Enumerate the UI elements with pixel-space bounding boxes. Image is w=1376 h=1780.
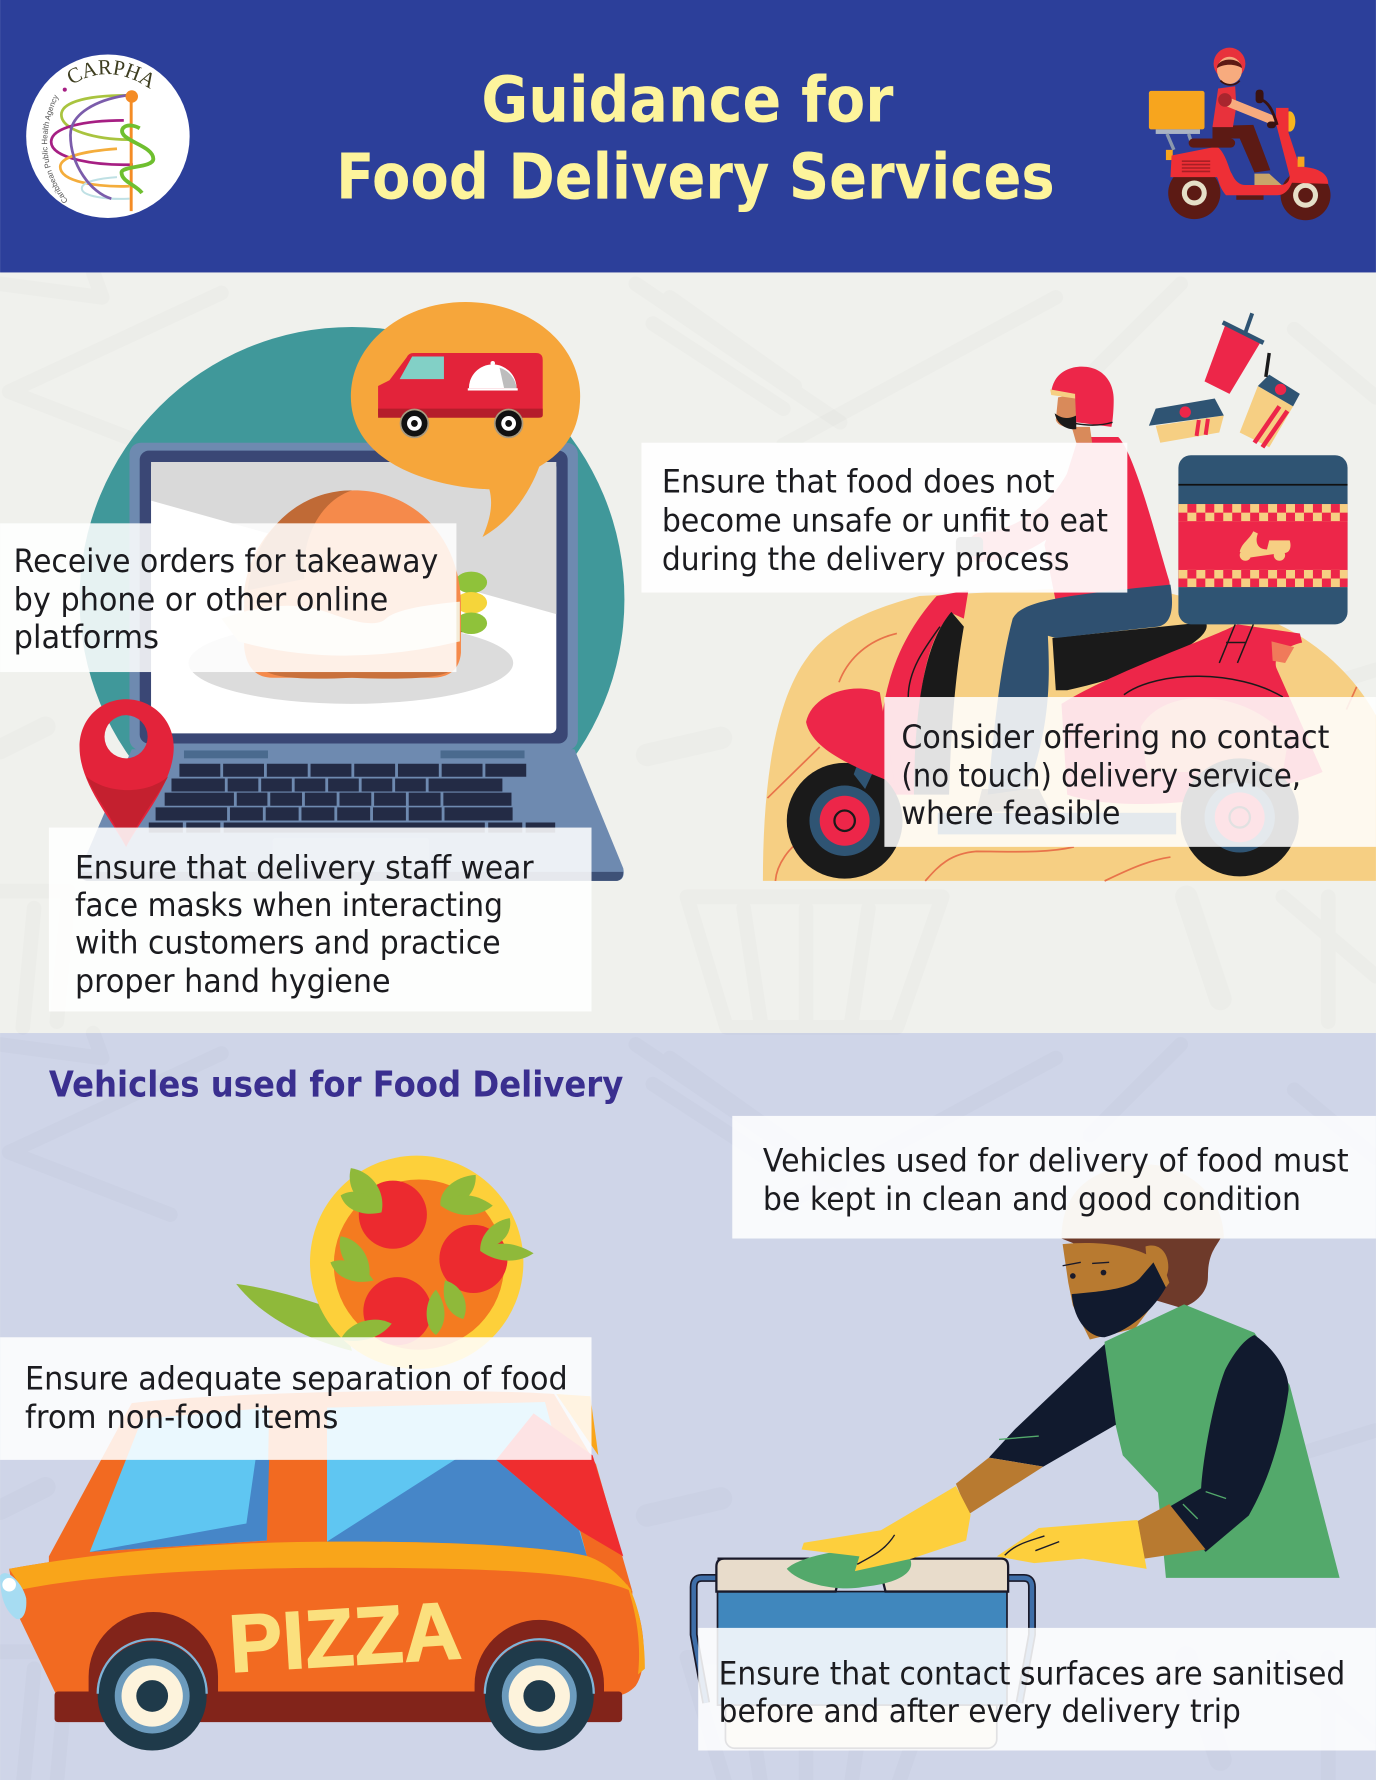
food items	[1149, 313, 1300, 447]
left arm	[989, 1344, 1116, 1467]
illustration: laptop with burger and delivery bubble	[80, 302, 624, 881]
icon: CARPHA logo: CARPHA	[68, 60, 152, 89]
callout: face masks and hygiene: face masks when interacting	[75, 886, 503, 924]
icon: CARPHA logo: Caribbean Public Health Agency	[42, 94, 67, 203]
illustration: pizza delivery car	[0, 1391, 645, 1750]
title: Food Delivery Services	[336, 140, 1055, 214]
callout: food safety in delivery	[641, 443, 1127, 593]
icon: map pin	[80, 699, 174, 847]
callout: food separation	[0, 1337, 592, 1460]
illustration: masked worker cleaning cooler	[694, 1164, 1340, 1748]
cap	[1061, 1164, 1224, 1239]
callout: face masks and hygiene: with customers and practice	[75, 924, 501, 962]
cooler	[694, 1559, 1032, 1748]
icon: speech bubble with van	[351, 302, 580, 537]
cloth	[787, 1550, 911, 1588]
panel: lower background	[0, 1033, 1376, 1780]
PIZZA lettering: PIZZA	[226, 1585, 464, 1690]
laptop screen	[129, 443, 578, 750]
callout: face masks and hygiene: Ensure that delivery staff wear	[75, 849, 534, 887]
icon: burger	[221, 490, 487, 679]
illustration: scooter rider with food box	[763, 313, 1376, 881]
front shield	[880, 590, 968, 795]
panel: upper background	[0, 272, 1376, 1033]
mask	[1072, 1262, 1166, 1337]
callout: sanitise surfaces: before and after every delivery trip	[719, 1692, 1241, 1730]
helmet and face	[1072, 427, 1092, 443]
backdrop blob	[763, 585, 1376, 881]
callout: vehicles clean	[732, 1116, 1376, 1239]
illustration: pizza	[236, 1156, 534, 1369]
car wheels	[98, 1639, 594, 1750]
wheels	[1181, 758, 1299, 876]
glove right	[997, 1520, 1147, 1569]
callout: no contact delivery: Consider offering no contact	[901, 718, 1329, 756]
title	[336, 62, 1055, 214]
rider body	[1044, 437, 1170, 602]
hair	[1061, 1239, 1220, 1308]
callout: food safety in delivery: become unsafe or unfit to eat	[662, 501, 1108, 539]
callout: food separation: from non-food items	[25, 1398, 338, 1436]
callout: food safety in delivery: during the delivery process	[662, 540, 1069, 578]
car body	[9, 1542, 644, 1696]
glove left	[802, 1486, 971, 1571]
car windows	[90, 1408, 269, 1552]
sill and wheel arches	[89, 1612, 218, 1703]
right arm	[1168, 1335, 1289, 1552]
callout: no contact delivery: (no touch) delivery service,	[901, 757, 1301, 795]
scooter floor	[938, 813, 1176, 834]
title: Guidance for	[481, 62, 894, 136]
callout: face masks and hygiene	[49, 828, 592, 1011]
laptop base	[80, 749, 624, 881]
callout: food safety in delivery: Ensure that food does not	[662, 463, 1055, 501]
callout: receive orders: by phone or other online	[14, 581, 388, 619]
callout: sanitise surfaces	[698, 1628, 1376, 1750]
delivery box	[1178, 455, 1348, 624]
front mudguard	[806, 688, 895, 783]
callout: vehicles clean: be kept in clean and good condition	[763, 1180, 1301, 1218]
callout: no contact delivery	[884, 697, 1376, 847]
panel: header band	[0, 0, 1376, 272]
headlight	[0, 1573, 26, 1619]
callout: receive orders	[0, 523, 456, 672]
icon: small scooter on box	[1240, 531, 1291, 561]
heading: vehicles section: Vehicles used for Food Delivery	[49, 1065, 623, 1106]
callout: receive orders: Receive orders for takeaway	[14, 542, 438, 580]
apron	[1105, 1304, 1340, 1578]
callout: no contact delivery: where feasible	[901, 794, 1121, 832]
callout: face masks and hygiene: proper hand hygiene	[75, 962, 391, 1000]
face	[1063, 1243, 1169, 1340]
icon: teal circle backdrop	[80, 327, 624, 872]
callout: receive orders: platforms	[14, 618, 159, 656]
callout: vehicles clean: Vehicles used for delivery of food must	[763, 1142, 1349, 1180]
seat and rear body	[1052, 622, 1207, 690]
callout: food separation: Ensure adequate separation of food	[25, 1359, 568, 1397]
icon: header delivery scooter	[1149, 48, 1331, 220]
icon: CARPHA logo	[26, 54, 190, 218]
